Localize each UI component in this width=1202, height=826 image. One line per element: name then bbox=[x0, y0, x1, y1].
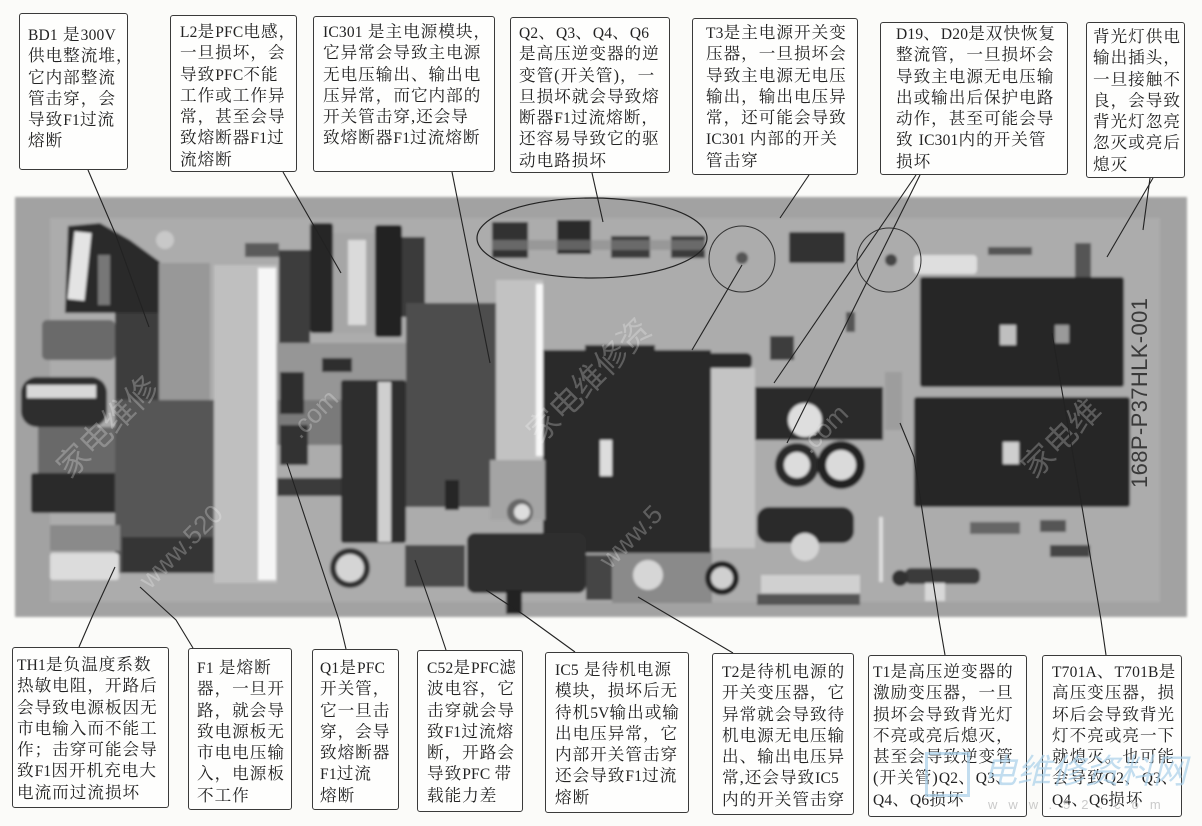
callout: D19 D20 bbox=[880, 22, 1068, 175]
callout: IC5: 待机5V输出或输 bbox=[555, 703, 680, 722]
callout: BD1: 它内部整流 bbox=[28, 68, 116, 87]
callout: T3 bbox=[692, 18, 858, 175]
callout: L2: L2是PFC电感， bbox=[180, 22, 296, 41]
callout: L2: 工作或工作异 bbox=[180, 86, 286, 105]
callout: IC5: 还会导致F1过流 bbox=[555, 766, 677, 785]
callout: T701A T701B: 坏后会导致背光 bbox=[1052, 705, 1175, 724]
callout: C52: 波电容，它 bbox=[427, 679, 515, 698]
callout: T1: 不亮或亮后熄灭， bbox=[873, 726, 1014, 745]
BD1 region bbox=[21, 223, 214, 580]
callout: TH1: 会导致电源板因无 bbox=[17, 698, 158, 717]
callout: IC5: 出电压异常，它 bbox=[555, 724, 678, 743]
callout: D19 D20: 整流管，一旦损坏会 bbox=[896, 45, 1054, 64]
callout: F1: 入，电源板 bbox=[197, 764, 285, 783]
watermarks on the photo: 家电维修资 bbox=[519, 311, 658, 450]
main heat sink bbox=[214, 265, 277, 583]
watermarks on the photo: 家电维 bbox=[1014, 392, 1108, 485]
callout: T1 bbox=[868, 655, 1027, 817]
callout: IC5 bbox=[545, 652, 689, 813]
callout: D19 D20: 出或输出后保护电路 bbox=[896, 88, 1054, 107]
callout: Q2 Q3 Q4 Q6: 变管(开关管)，一 bbox=[519, 66, 655, 85]
callout: IC301: 无电压输出、输出电 bbox=[323, 65, 481, 84]
callout: Q2 Q3 Q4 Q6: 还容易导致它的驱 bbox=[519, 129, 660, 148]
callout: T701A T701B: 高压变压器，损 bbox=[1052, 683, 1175, 702]
L2 PFC inductor bbox=[245, 223, 425, 343]
callout: BD1: BD1 是300V bbox=[28, 25, 116, 44]
callout: L2: 常，甚至会导 bbox=[180, 107, 286, 126]
callout: F1: 器，一旦开 bbox=[197, 679, 285, 698]
watermarks on the photo: 家电维修 bbox=[49, 369, 165, 485]
watermark: site logo bbox=[925, 752, 1191, 812]
callout: T2: 异常就会导致待 bbox=[722, 705, 845, 724]
callout: L2: 一旦损坏，会 bbox=[180, 43, 286, 62]
circuit board photo bbox=[15, 197, 1187, 617]
callout: BD1: 熔断 bbox=[28, 131, 63, 150]
callout: backlight connector bbox=[1086, 22, 1185, 178]
callout: C52: 断，开路会 bbox=[427, 743, 515, 762]
watermark: site logo: www.52.com bbox=[988, 797, 1172, 812]
callout: Q1 bbox=[312, 649, 399, 810]
callout: T2: 常,还会导致IC5 bbox=[722, 768, 839, 787]
callout: backlight connector: 熄灭 bbox=[1093, 155, 1128, 174]
watermark: site logo: 电维修资料网 bbox=[983, 753, 1187, 791]
callout: C52: 击穿就会导 bbox=[427, 701, 515, 720]
callout: T1: (开关管)Q2、Q3、 bbox=[873, 768, 1013, 787]
callout: T701A T701B: 灯不亮或亮一下 bbox=[1052, 726, 1175, 745]
callout: TH1: 作；击穿可能会导 bbox=[17, 740, 158, 759]
callout: IC5: 熔断 bbox=[555, 788, 590, 807]
callout: backlight connector: 输出插头， bbox=[1093, 48, 1181, 67]
callout: C52: 导致PFC 带 bbox=[427, 764, 512, 783]
callout: TH1: 热敏电阻，开路后 bbox=[17, 676, 158, 695]
callout: IC301: 它异常会导致主电源 bbox=[323, 43, 481, 62]
callout: T1: 激励变压器，一旦 bbox=[873, 683, 1014, 702]
callout: BD1: 管击穿，会 bbox=[28, 89, 116, 108]
T3 component and D19 D20 zone bbox=[736, 232, 902, 605]
callout: TH1 bbox=[12, 647, 169, 808]
callout: T3: 压器，一旦损坏会 bbox=[706, 44, 847, 63]
callout: backlight connector: 一旦接触不 bbox=[1093, 70, 1181, 89]
callout: backlight connector: 良，会导致 bbox=[1093, 91, 1181, 110]
callout: F1 bbox=[188, 648, 292, 810]
callout: BD1 bbox=[19, 13, 128, 170]
callout: D19 D20: 致 IC301内的开关管 bbox=[896, 130, 1046, 149]
callout: F1: 路，就会导 bbox=[197, 701, 285, 720]
callout: C52: C52是PFC滤 bbox=[427, 658, 517, 677]
callout: C52: 致F1过流熔 bbox=[427, 722, 514, 741]
callout: L2: 流熔断 bbox=[180, 150, 233, 169]
leader lines bbox=[79, 170, 1153, 655]
circle marking D19 D20 bbox=[857, 228, 921, 292]
watermarks on the photo: www.520 bbox=[132, 498, 229, 595]
T2 standby transformer zone bbox=[467, 345, 755, 614]
board silkscreen part number: 168P-P37HLK-001 bbox=[1127, 298, 1152, 488]
callout: Q1: 开关管， bbox=[320, 679, 390, 698]
callout: Q2 Q3 Q4 Q6 bbox=[510, 17, 670, 173]
callout: IC301: 致熔断器F1过流熔断 bbox=[323, 128, 481, 147]
callout: T2: 开关变压器，它 bbox=[722, 683, 845, 702]
callout: T3: 管击穿 bbox=[706, 151, 759, 170]
callout: L2: 导致PFC不能 bbox=[180, 65, 279, 84]
callout: D19 D20: 导致主电源无电压输 bbox=[896, 67, 1054, 86]
T1 driver transformer zone bbox=[892, 568, 980, 601]
callout: T3: IC301 内部的开关 bbox=[706, 129, 838, 148]
callout: Q1: 它一旦击 bbox=[320, 701, 390, 720]
callout: Q2 Q3 Q4 Q6: 是高压逆变器的逆 bbox=[519, 44, 660, 63]
watermarks on the photo: .com bbox=[793, 398, 854, 459]
callout: IC301: 压异常，而它内部的 bbox=[323, 86, 481, 105]
callout: L2: 致熔断器F1过 bbox=[180, 128, 285, 147]
callout: backlight connector: 背光灯供电 bbox=[1093, 27, 1181, 46]
callout: T3: 输出，输出电压异 bbox=[706, 87, 847, 106]
T701A and T701B high voltage transformers bbox=[914, 243, 1130, 557]
callout: T1: 甚至会导致逆变管 bbox=[873, 747, 1014, 766]
callout: T701A T701B bbox=[1042, 655, 1182, 817]
ellipse marking Q2 Q3 Q4 Q6 bbox=[477, 198, 707, 278]
callout: Q1: F1过流 bbox=[320, 764, 372, 783]
callout: F1: 市电电压输 bbox=[197, 743, 285, 762]
second heat sink bbox=[496, 280, 543, 460]
Q2 Q3 Q4 Q6 transistors bbox=[492, 220, 705, 258]
callout: TH1: 市电输入而不能工 bbox=[17, 719, 158, 738]
callout: Q2 Q3 Q4 Q6: 断器F1过流熔断， bbox=[519, 108, 659, 127]
callout: Q1: 熔断 bbox=[320, 786, 355, 805]
callout: IC301: IC301 是主电源模块， bbox=[323, 22, 491, 41]
watermarks on the photo bbox=[49, 311, 1108, 595]
callout: IC5: 内部开关管击穿 bbox=[555, 745, 678, 764]
callout: T3: 导致主电源无电压 bbox=[706, 66, 847, 85]
callout: IC5: 模块，损坏后无 bbox=[555, 681, 678, 700]
callout: D19 D20: D19、D20是双快恢复 bbox=[896, 24, 1056, 43]
callout: Q2 Q3 Q4 Q6: 动电路损坏 bbox=[519, 151, 607, 170]
watermarks on the photo: .com bbox=[283, 383, 344, 444]
callout: TH1: 致F1因开机充电大 bbox=[17, 761, 157, 780]
callout: Q1: Q1是PFC bbox=[320, 658, 385, 677]
callout: L2 bbox=[170, 15, 297, 172]
callout: Q2 Q3 Q4 Q6: 旦损坏就会导致熔 bbox=[519, 87, 660, 106]
callout: T2 bbox=[712, 653, 854, 815]
callout: IC5: IC5 是待机电源 bbox=[555, 660, 672, 679]
callout: T701A T701B: 就熄灭。也可能 bbox=[1052, 747, 1175, 766]
callout: D19 D20: 动作，甚至可能会导 bbox=[896, 109, 1054, 128]
callout: T2: 出、输出电压异 bbox=[722, 747, 845, 766]
callout: F1: F1 是熔断 bbox=[197, 658, 272, 677]
callout: D19 D20: 损坏 bbox=[896, 152, 931, 171]
callout: T3: T3是主电源开关变 bbox=[706, 23, 847, 42]
PFC area and Q1 capacitor bbox=[277, 303, 496, 588]
callout: T701A T701B: 会导致Q2、Q3、 bbox=[1052, 768, 1179, 787]
callout: C52 bbox=[417, 650, 523, 812]
callout: T701A T701B: T701A、T701B是 bbox=[1052, 662, 1176, 681]
callout: IC301: 开关管击穿,还会导 bbox=[323, 107, 469, 126]
callout: IC301 bbox=[313, 16, 495, 172]
callout: TH1: TH1是负温度系数 bbox=[17, 655, 152, 674]
callout: Q2 Q3 Q4 Q6: Q2、Q3、Q4、Q6 bbox=[519, 23, 649, 42]
callout: T2: 内的开关管击穿 bbox=[722, 790, 845, 809]
circle marking T3 bbox=[709, 226, 775, 292]
callout: T701A T701B: Q4、Q6损坏 bbox=[1052, 790, 1143, 809]
callout: T3: 常，还可能会导致 bbox=[706, 108, 847, 127]
callout: Q1: 致熔断器 bbox=[320, 743, 390, 762]
callout: BD1: 导致F1过流 bbox=[28, 110, 115, 129]
callout: F1: 不工作 bbox=[197, 786, 250, 805]
callout: backlight connector: 背光灯忽亮 bbox=[1093, 112, 1181, 131]
callout: T1: 损坏会导致背光灯 bbox=[873, 705, 1014, 724]
callout: T2: 机电源无电压输 bbox=[722, 726, 845, 745]
callout: TH1: 电流而过流损坏 bbox=[17, 783, 140, 802]
callout: F1: 致电源板无 bbox=[197, 722, 285, 741]
watermarks on the photo: www.5 bbox=[592, 499, 668, 575]
callout: T2: T2是待机电源的 bbox=[722, 662, 845, 681]
callout: backlight connector: 忽灭或亮后 bbox=[1093, 133, 1181, 152]
callout: Q1: 穿，会导 bbox=[320, 722, 390, 741]
callout: C52: 载能力差 bbox=[427, 786, 497, 805]
callout: T1: Q4、Q6损坏 bbox=[873, 790, 964, 809]
callout: T1: T1是高压逆变器的 bbox=[873, 662, 1014, 681]
